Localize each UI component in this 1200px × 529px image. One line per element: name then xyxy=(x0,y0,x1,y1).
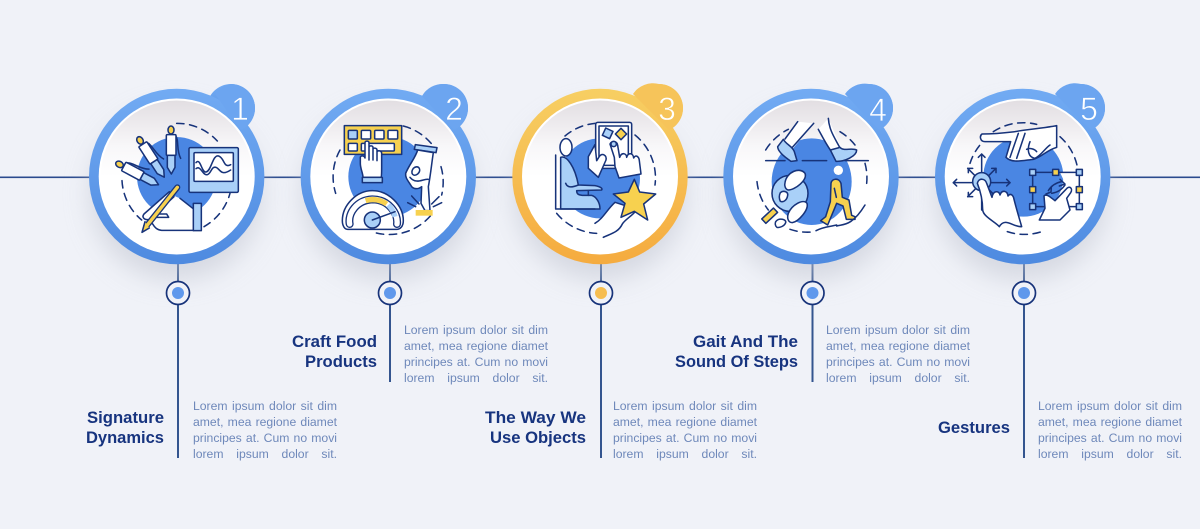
node marker 5 xyxy=(1012,282,1036,304)
heading: Craft Food Products: Products xyxy=(305,352,377,371)
text block 3: lorem ipsum dolor sit. xyxy=(613,447,757,461)
step 4 circle xyxy=(723,84,899,280)
heading: Signature Dynamics: Dynamics xyxy=(86,428,164,447)
text block 2: amet, mea regione diamet xyxy=(404,339,548,353)
icon: signature pens and hand xyxy=(114,123,238,232)
text block 5 xyxy=(1038,399,1182,461)
vertical connector lines xyxy=(177,262,1025,458)
heading: Craft Food Products xyxy=(292,332,377,371)
badge number 4: 4 xyxy=(869,92,887,128)
icon: walking feet, footprints and hiker xyxy=(757,118,868,232)
text block 1: principes at. Cum no movi xyxy=(193,431,337,445)
heading: Craft Food Products: Craft Food xyxy=(292,332,377,351)
text block 4: lorem ipsum dolor sit. xyxy=(826,371,970,385)
step 1 circle xyxy=(89,84,264,280)
text block 5: Lorem ipsum dolor sit dim xyxy=(1038,399,1182,413)
icon: gesture hands and selection box xyxy=(953,123,1082,234)
text block 1: lorem ipsum dolor sit. xyxy=(193,447,337,461)
text block 4: amet, mea regione diamet xyxy=(826,339,970,353)
step 3 circle xyxy=(512,83,688,280)
badge number 2: 2 xyxy=(445,91,463,127)
node marker 3 xyxy=(590,282,612,304)
heading: The Way We Use Objects: Use Objects xyxy=(490,428,586,447)
text block 5: lorem ipsum dolor sit. xyxy=(1038,447,1182,461)
node marker 2 xyxy=(378,282,402,304)
text block 4: Lorem ipsum dolor sit dim xyxy=(826,323,970,337)
node marker 1 xyxy=(166,282,190,304)
heading: Signature Dynamics: Signature xyxy=(87,408,164,427)
step 5 circle xyxy=(935,83,1110,280)
text block 3 xyxy=(613,399,757,461)
text block 1 xyxy=(193,399,337,461)
heading: Gait And The Sound Of Steps: Gait And The xyxy=(693,332,798,351)
node marker 4 xyxy=(801,282,824,304)
text block 3: amet, mea regione diamet xyxy=(613,415,757,429)
badge number 1: 1 xyxy=(231,91,249,127)
icon: keyboard, gauge and gripping hand xyxy=(333,126,443,235)
badge number 3: 3 xyxy=(658,91,676,127)
heading: Gait And The Sound Of Steps xyxy=(675,332,798,371)
text block 5: principes at. Cum no movi xyxy=(1038,431,1182,445)
text block 2 xyxy=(404,323,548,385)
text block 3: principes at. Cum no movi xyxy=(613,431,757,445)
text block 4: principes at. Cum no movi xyxy=(826,355,970,369)
text block 1: amet, mea regione diamet xyxy=(193,415,337,429)
heading: Gestures: Gestures xyxy=(938,418,1010,437)
heading: Gait And The Sound Of Steps: Sound Of Steps xyxy=(675,352,798,371)
heading: Signature Dynamics xyxy=(86,408,164,447)
text block 2: lorem ipsum dolor sit. xyxy=(404,371,548,385)
heading: The Way We Use Objects xyxy=(485,408,586,447)
text block 5: amet, mea regione diamet xyxy=(1038,415,1182,429)
text block 2: Lorem ipsum dolor sit dim xyxy=(404,323,548,337)
text block 2: principes at. Cum no movi xyxy=(404,355,548,369)
icon: seated person, tablet and star xyxy=(556,122,656,237)
step 2 circle xyxy=(301,84,476,280)
text block 3: Lorem ipsum dolor sit dim xyxy=(613,399,757,413)
text block 4 xyxy=(826,323,970,385)
badge number 5: 5 xyxy=(1080,91,1098,127)
text block 1: Lorem ipsum dolor sit dim xyxy=(193,399,337,413)
horizontal timeline xyxy=(0,176,1200,178)
heading: The Way We Use Objects: The Way We xyxy=(485,408,586,427)
